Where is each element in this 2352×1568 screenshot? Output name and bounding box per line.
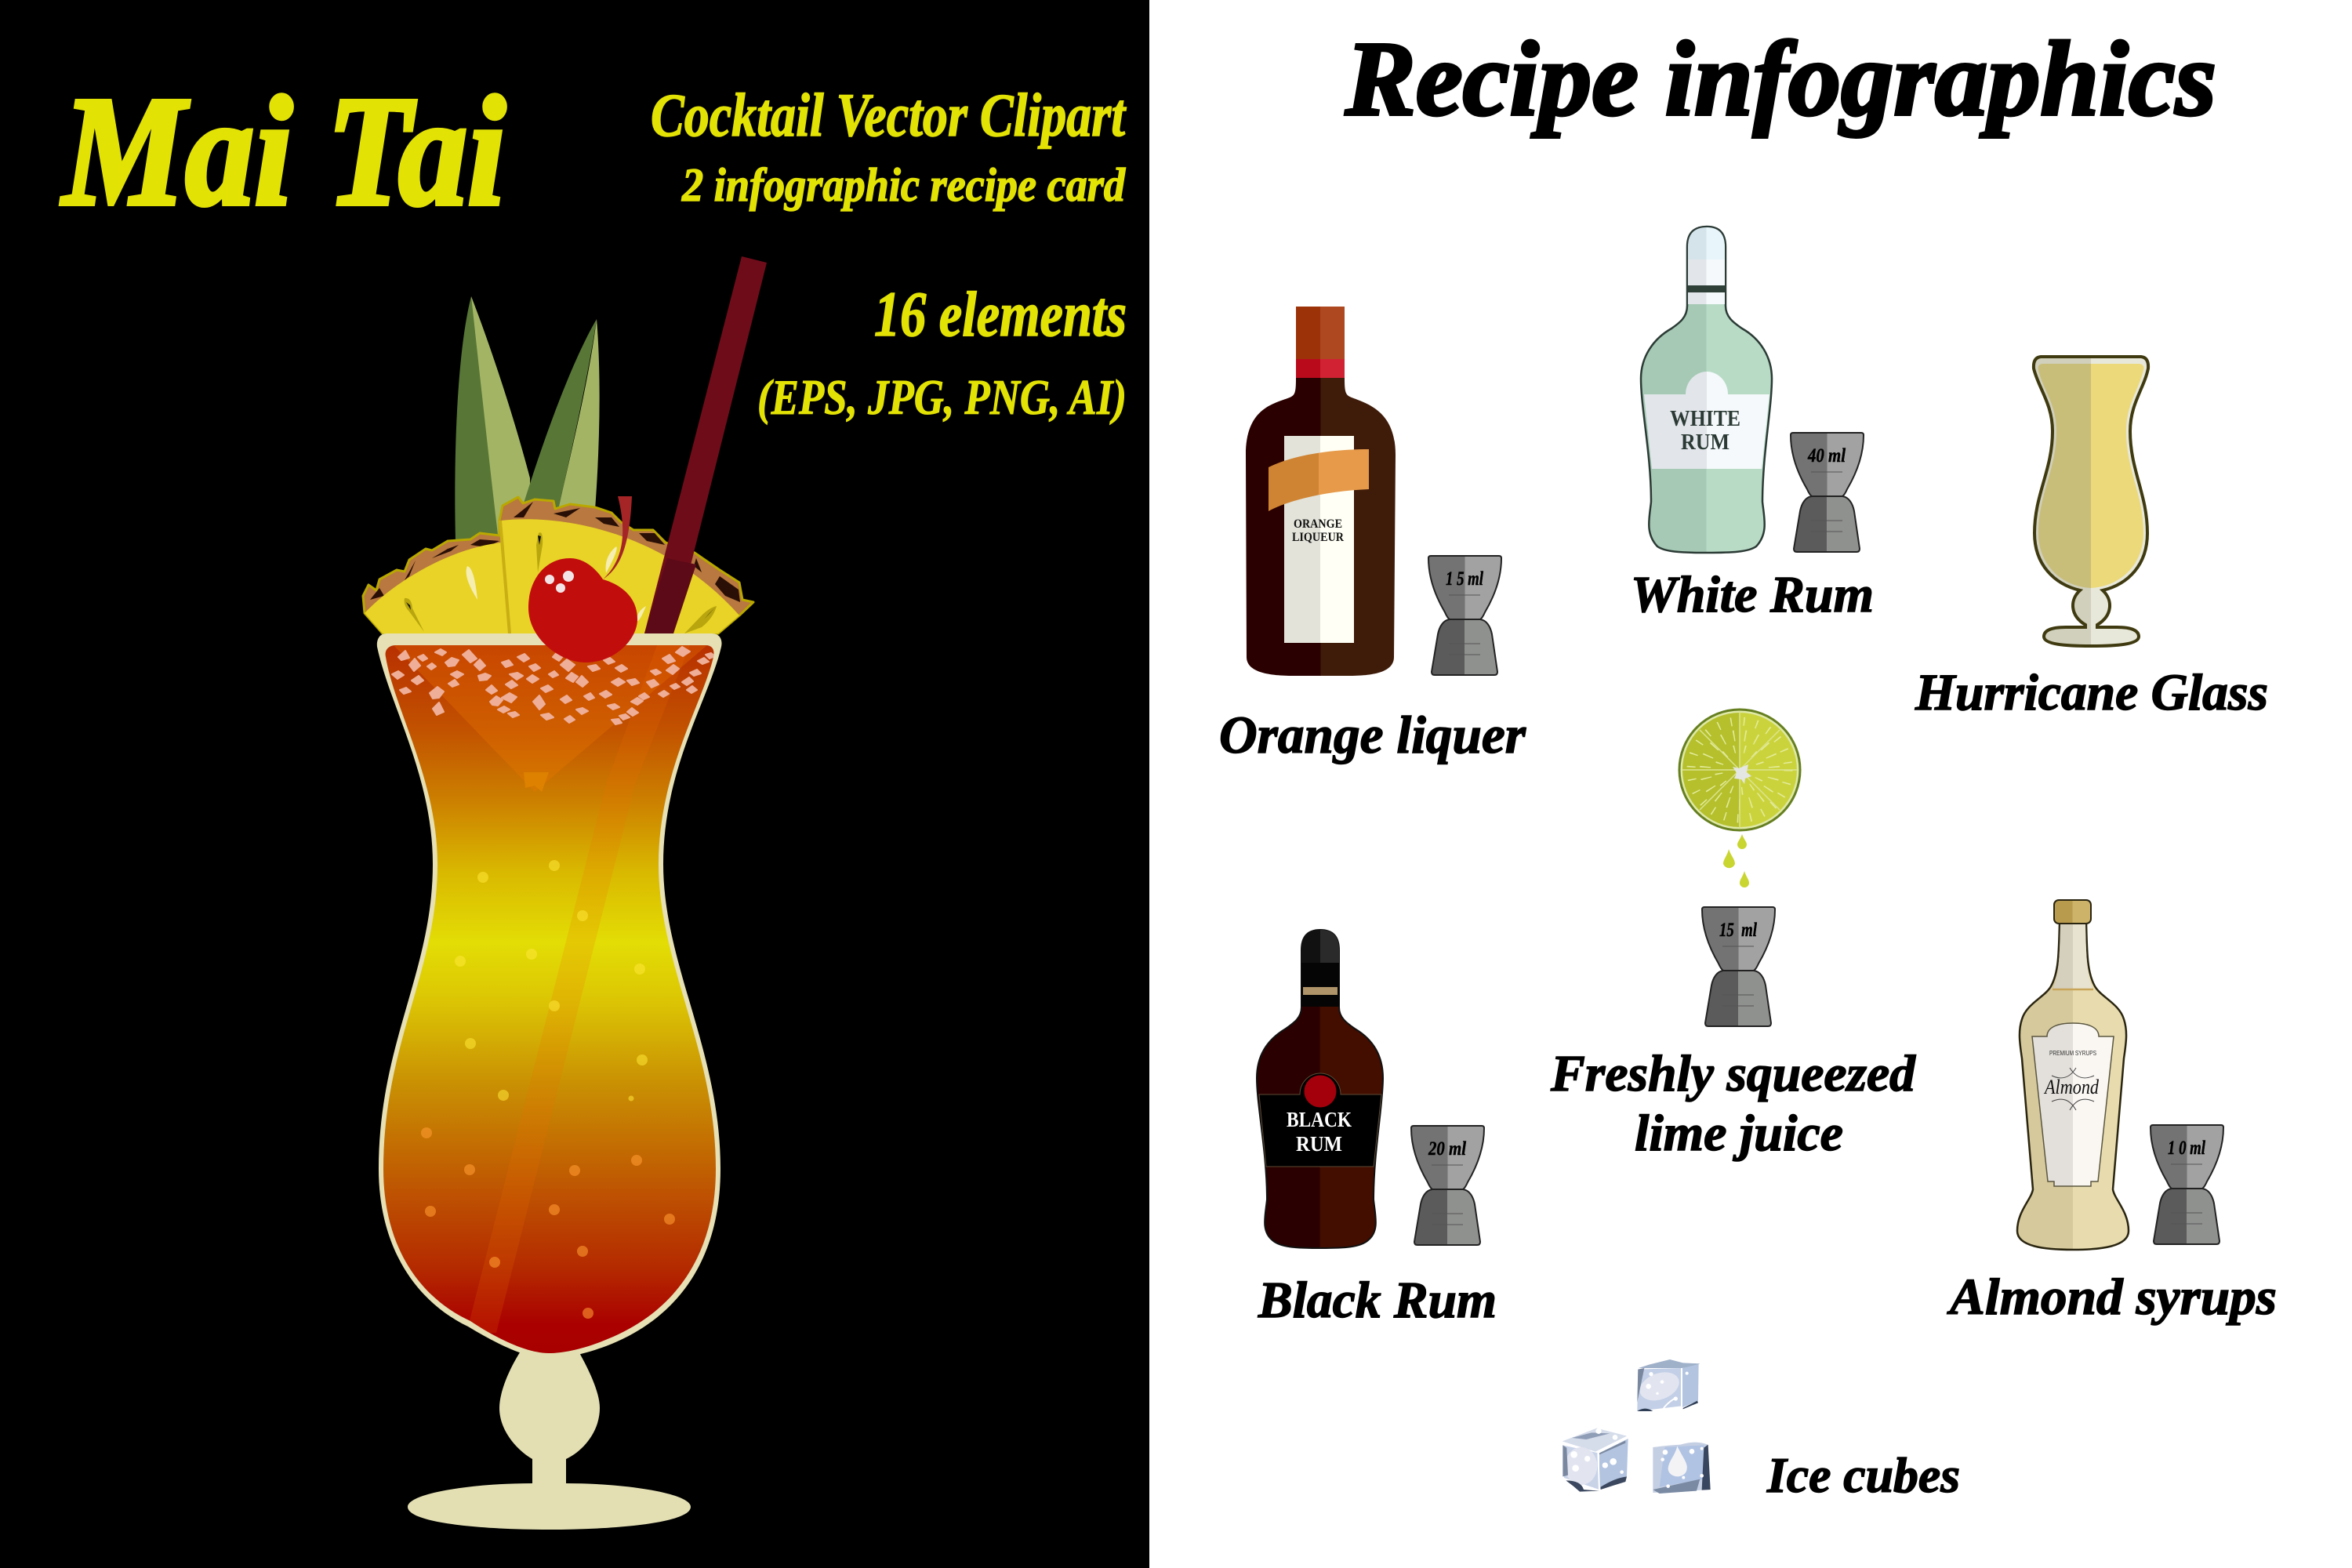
- icon: jigger 40 ml white rum: [1791, 433, 1864, 552]
- label: Freshly squeezed lime juice: Freshly squeezed: [1550, 1045, 1916, 1102]
- label: Hurricane Glass: Hurricane Glass: [1915, 664, 2268, 721]
- salt rim flakes: [392, 647, 715, 724]
- label: Freshly squeezed lime juice: [1550, 1045, 1916, 1162]
- icon: white rum bottle: [1641, 227, 1772, 553]
- icon: jigger 20 ml black rum: 20 ml: [1428, 1138, 1466, 1160]
- ice cube left: [1563, 1428, 1628, 1492]
- icon: pineapple leaves: [455, 296, 600, 541]
- ice cube top: [1636, 1359, 1700, 1411]
- title: Recipe infographics: Recipe infographics: [1345, 20, 2216, 138]
- icon: white rum bottle: WHITE: [1670, 407, 1740, 431]
- bubbles: [455, 860, 648, 1101]
- icon: jigger 15 ml orange liqueur: 1 5 ml: [1446, 568, 1483, 590]
- icon: white rum bottle: RUM: [1681, 430, 1730, 455]
- icon: jigger 10 ml almond syrup: [2151, 1125, 2223, 1244]
- icon: lime slice: [1679, 710, 1800, 830]
- label: Freshly squeezed lime juice: lime juice: [1635, 1105, 1843, 1162]
- glass outline: [377, 633, 721, 1359]
- glass stem and foot: [408, 1350, 691, 1530]
- icon: ice cubes: [1563, 1359, 1711, 1494]
- icon: almond syrup bottle: [2017, 900, 2129, 1250]
- icon: jigger 40 ml white rum: 40 ml: [1807, 445, 1846, 466]
- subtitle: Cocktail Vector Clipart: Cocktail Vector Clipart: [651, 81, 1127, 149]
- icon: jigger 15 ml lime juice: 15 ml: [1719, 920, 1757, 941]
- subtitle: 2 infographic recipe card: 2 infographic recipe card: [681, 159, 1126, 211]
- label: Orange liquer: Orange liquer: [1219, 705, 1526, 764]
- ice cube right: [1653, 1443, 1711, 1494]
- icon: black rum bottle: [1257, 930, 1383, 1248]
- label: Black Rum: Black Rum: [1258, 1272, 1497, 1329]
- text: 16 elements: 16 elements: [874, 278, 1127, 350]
- panel: white recipe panel: [1149, 0, 2352, 1568]
- icon: orange liqueur bottle: [1246, 307, 1396, 676]
- icon: black rum bottle: BLACK: [1287, 1108, 1352, 1131]
- label: Almond syrups: Almond syrups: [1947, 1269, 2277, 1326]
- icon: almond syrup bottle: Almond: [2043, 1076, 2100, 1098]
- icon: black rum bottle: RUM: [1296, 1132, 1342, 1156]
- text: file formats: (EPS, JPG, PNG, AI): [757, 369, 1127, 425]
- panel: black cocktail panel: [0, 0, 1149, 1568]
- icon: cherry: [528, 496, 637, 662]
- label: White Rum: White Rum: [1631, 566, 1874, 623]
- icon: jigger 15 ml lime juice: [1702, 907, 1775, 1026]
- cocktail liquid: [376, 643, 721, 1356]
- icon: jigger 10 ml almond syrup: 1 0 ml: [2168, 1138, 2205, 1159]
- icon: hurricane glass: [2034, 357, 2148, 646]
- icon: lime juice drops: [1723, 834, 1749, 887]
- label: Ice cubes: Ice cubes: [1766, 1447, 1960, 1503]
- title: Mai Tai: Mai Tai: [60, 65, 506, 238]
- icon: almond syrup bottle: PREMIUM SYRUPS: [2049, 1050, 2096, 1057]
- icon: straw: [644, 256, 767, 633]
- illustration: Mai Tai cocktail: [363, 256, 767, 1530]
- icon: jigger 20 ml black rum: [1411, 1126, 1484, 1245]
- icon: pineapple slice: [363, 497, 753, 633]
- icon: orange liqueur bottle: LIQUEUR: [1292, 531, 1344, 544]
- icon: jigger 15 ml orange liqueur: [1428, 556, 1501, 675]
- icon: orange liqueur bottle: ORANGE: [1294, 517, 1342, 531]
